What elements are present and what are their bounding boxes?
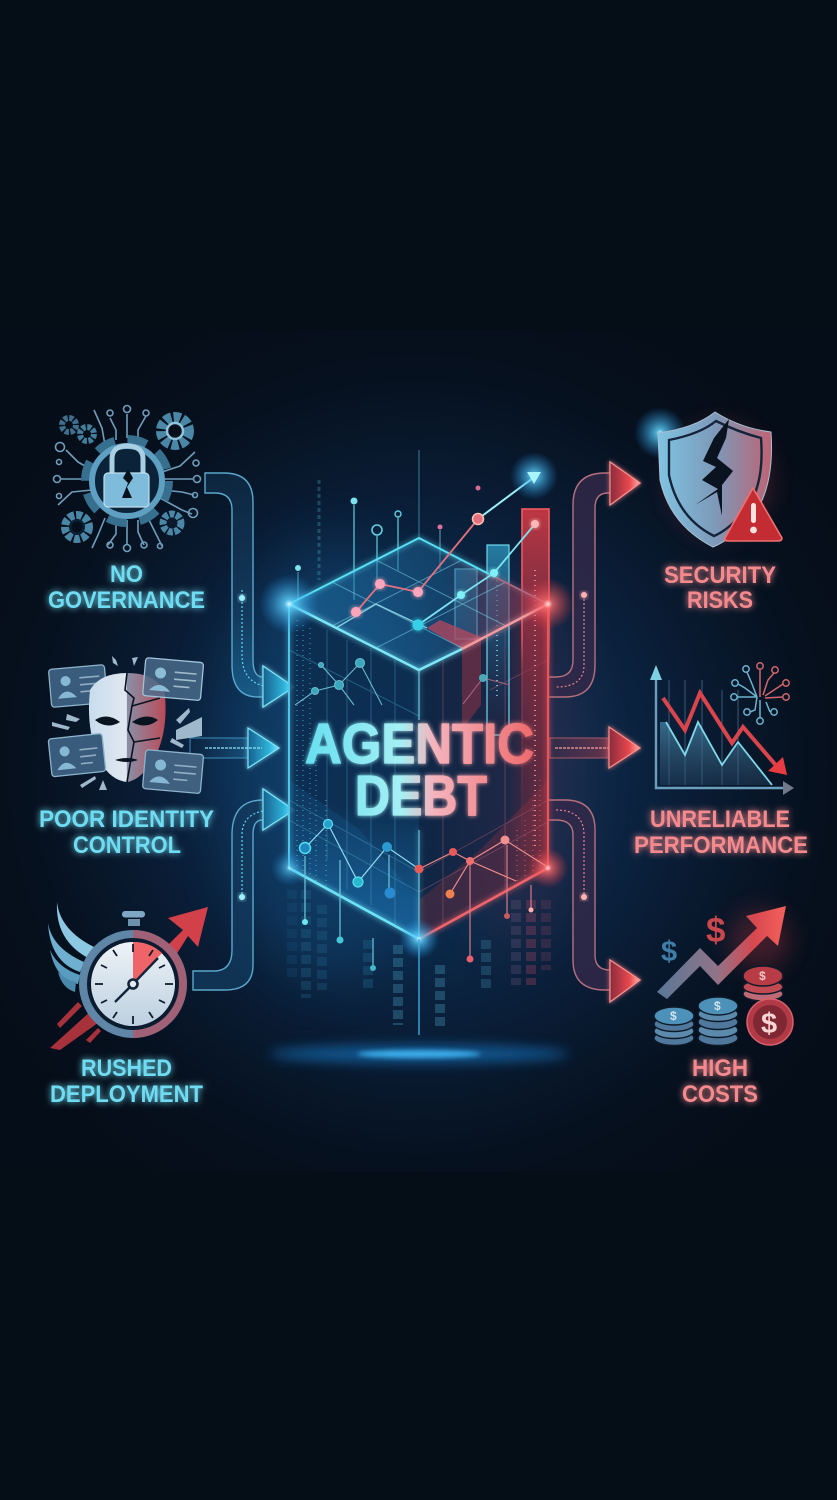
label: rushed deployment: DEPLOYMENT [50,1081,203,1108]
warning triangle [725,488,782,541]
arrow: cube to unreliable performance [550,727,640,768]
watch case [79,930,187,1038]
upper left-face network chart [295,658,510,705]
label: poor identity control: POOR IDENTITY [39,806,214,833]
red time wedge [133,942,162,984]
label: unreliable performance: PERFORMANCE [634,832,808,859]
red arrow [168,907,208,955]
coin stack dollar marks: $ [714,999,721,1013]
icon: declining performance chart [650,663,794,795]
icon: padlock with gears and circuits [54,406,200,552]
watch hands [115,958,158,1002]
label: high costs: HIGH [692,1055,748,1082]
particle texture and face panel lines [289,620,548,925]
arrow: no governance to cube [205,473,294,707]
central cube: agentic debt [259,450,574,1035]
title text [305,712,534,828]
coin stack dollar marks [670,969,766,1023]
icon: rising costs arrow and coins: $ [761,1008,777,1040]
rising arrow [657,906,786,999]
label: high costs [682,1055,758,1108]
data pillars below the cube [292,890,546,1030]
upper identity cards [48,665,108,707]
arrow: cube to security risks [548,462,640,697]
red speed streaks [50,1002,102,1050]
glowing cube edges [289,538,548,939]
label: rushed deployment: RUSHED [81,1055,172,1082]
bars rising from the cube [455,509,549,868]
floor glow [269,1045,569,1063]
wings [48,902,94,992]
label: unreliable performance [634,806,808,859]
label: security risks: RISKS [687,587,753,614]
icon: rising costs arrow and coins: $ [706,911,725,950]
title text: DEBT [355,764,487,828]
icon: rising costs arrow and coins [654,906,793,1046]
background glow behind cube [220,540,580,980]
central gear [85,439,169,523]
label: no governance: NO [110,561,143,588]
label: security risks [664,562,776,614]
central panel background [0,330,837,1172]
label: poor identity control [39,806,214,859]
lower face network chart and hanging nodes [300,820,546,1035]
label: no governance: GOVERNANCE [48,587,205,614]
coin stack dollar marks: $ [759,969,766,983]
tick marks [95,944,173,1024]
icon: cracked shield with warning [634,407,782,547]
crown [122,911,145,918]
label: security risks: SECURITY [664,562,776,589]
axes [656,672,785,788]
arrow: poor identity control to cube [190,728,279,768]
right and lower cards [143,658,204,701]
label: unreliable performance: UNRELIABLE [650,806,790,833]
falling blue area [660,722,772,785]
cube side faces [289,604,548,939]
title text: AGENTIC [305,712,534,776]
flying shards [52,656,202,790]
icon: cracked mask with identity cards [48,656,204,794]
label: rushed deployment [50,1055,203,1108]
dollar signs: $ [661,936,677,968]
rising trend chart lines [351,478,539,630]
small circuit icon [731,663,789,724]
cube top face with grid [289,538,548,670]
label: poor identity control: CONTROL [73,832,181,859]
coin stack dollar marks: $ [670,1009,677,1023]
rising data stalks above the cube [295,450,480,600]
arrow: cube to high costs [548,800,640,1002]
large red coin [747,999,793,1045]
label: no governance [48,561,205,614]
starburst glints on cube corners [259,452,574,959]
small gears [62,417,189,539]
coin stack: blue small [654,966,783,1046]
falling red line [663,693,780,770]
lock shackle and body [112,446,143,473]
arrow: rushed deployment to cube [193,789,294,990]
label: high costs: COSTS [682,1081,758,1108]
icon: winged stopwatch with red arrow [48,902,208,1050]
mask [89,673,166,782]
